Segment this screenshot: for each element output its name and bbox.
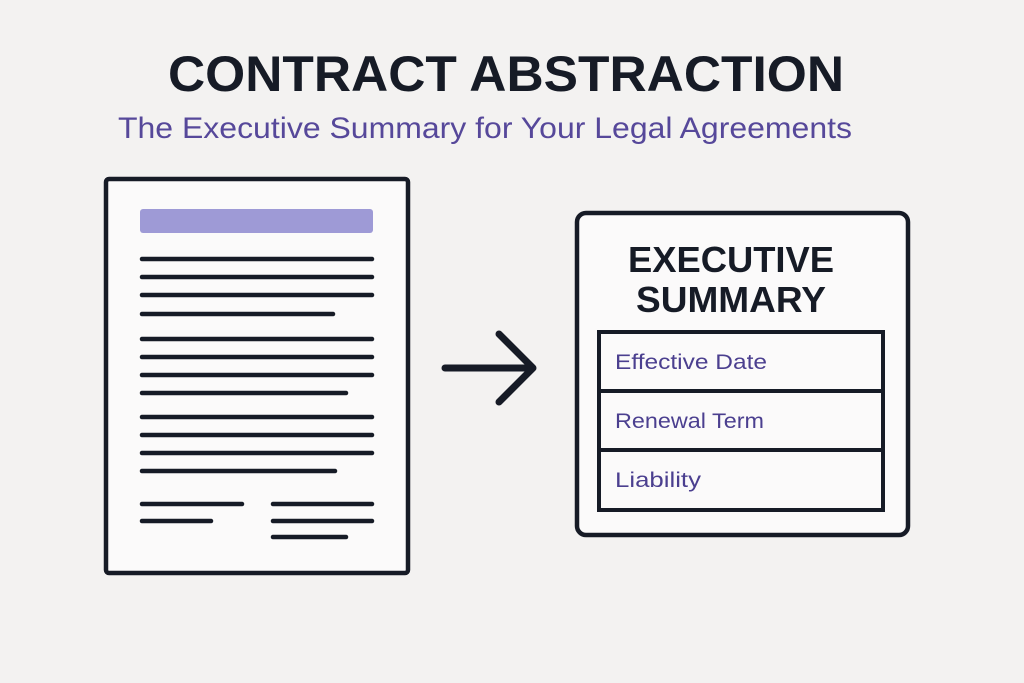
table: key terms: Liability — [615, 469, 702, 492]
panel: executive summary — [577, 213, 908, 535]
arrow — [445, 334, 533, 402]
heading: executive summary: SUMMARY — [636, 279, 826, 320]
subtitle: The Executive Summary for Your Legal Agreements — [118, 112, 852, 145]
heading: executive summary: EXECUTIVE — [628, 239, 834, 280]
table: key terms — [599, 332, 883, 510]
title: CONTRACT ABSTRACTION — [168, 46, 844, 102]
table: key terms: Effective Date — [615, 351, 767, 374]
table: key terms: Renewal Term — [615, 410, 764, 433]
icon: contract document — [106, 179, 408, 573]
heading: executive summary — [628, 239, 834, 320]
